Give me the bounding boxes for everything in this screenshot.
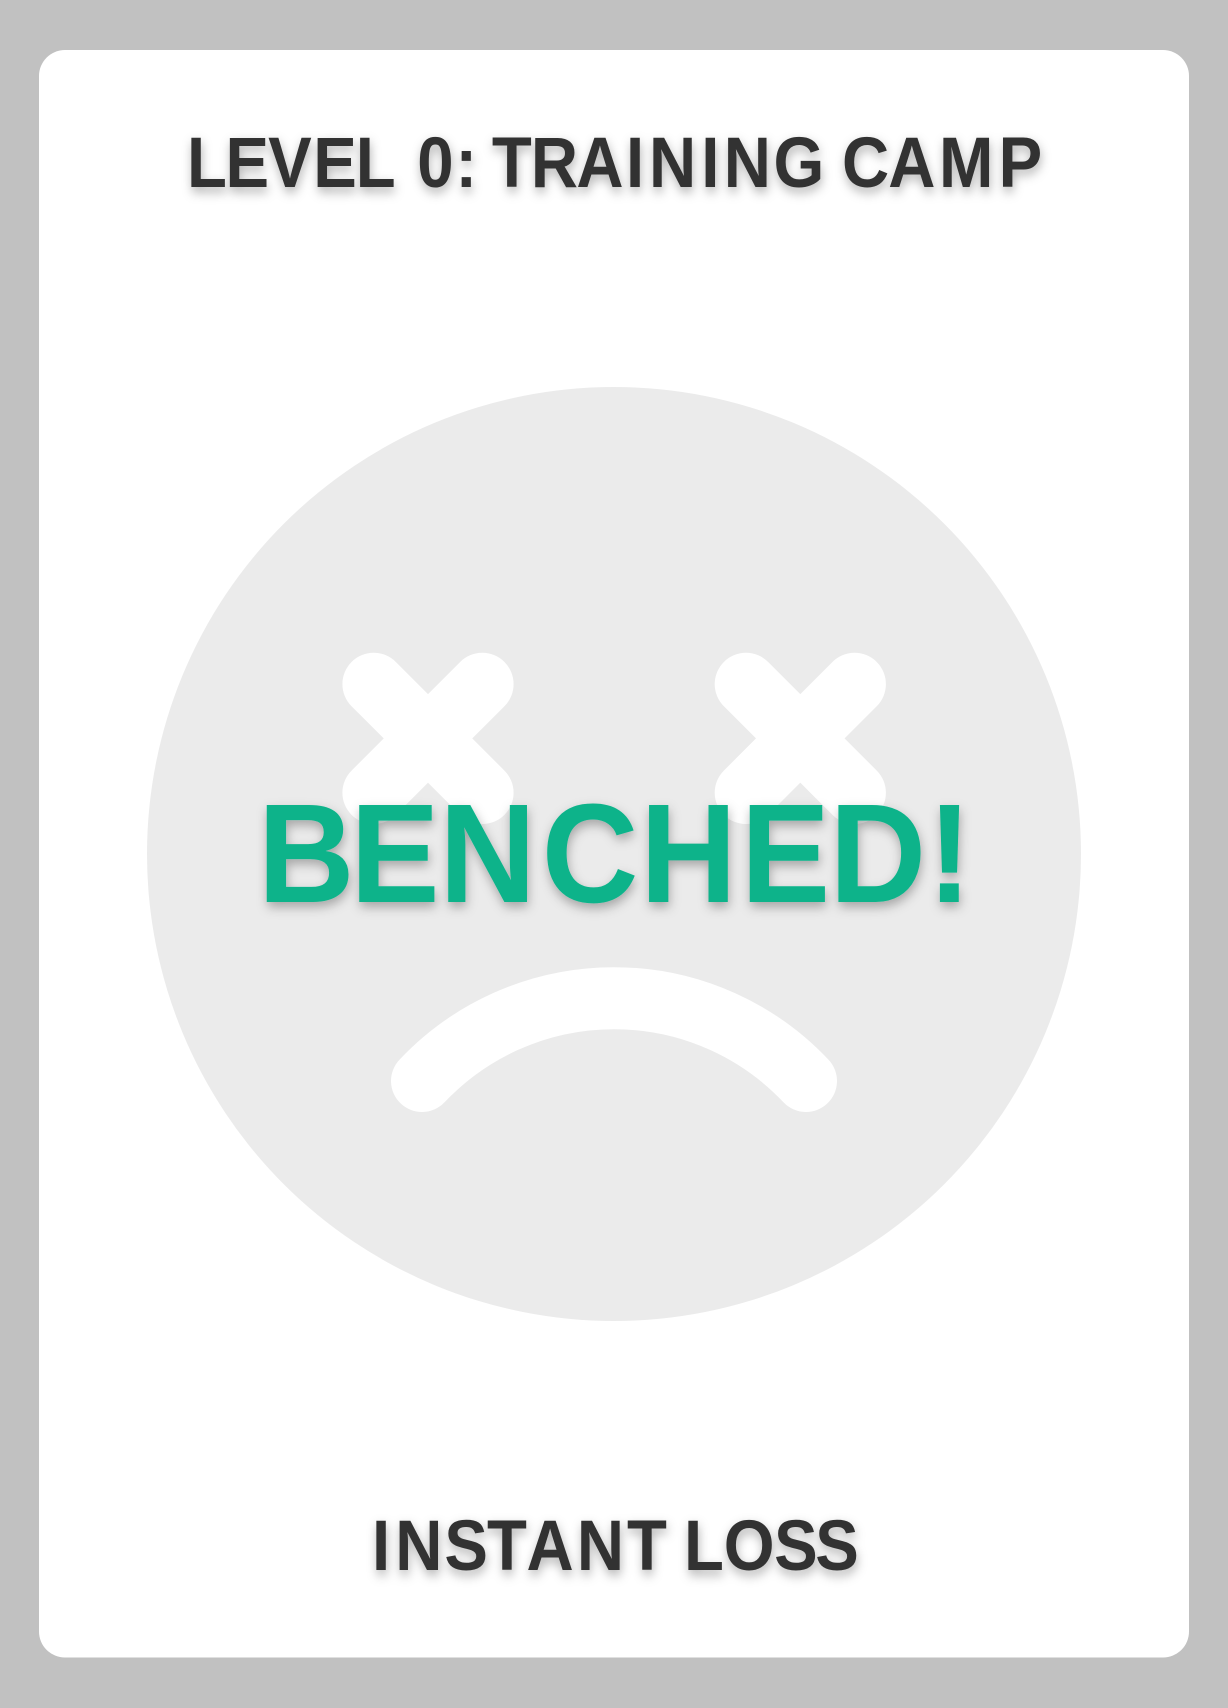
icon: sad face <box>147 387 1081 1321</box>
title: LEVEL 0: TRAINING CAMP <box>187 124 1042 203</box>
face circle <box>147 387 1081 1321</box>
headline: benched: BENCHED! <box>258 776 972 933</box>
footer label: INSTANT LOSS <box>372 1507 859 1586</box>
left x eye <box>374 684 482 793</box>
frown mouth <box>422 998 806 1081</box>
right x eye <box>746 684 855 793</box>
